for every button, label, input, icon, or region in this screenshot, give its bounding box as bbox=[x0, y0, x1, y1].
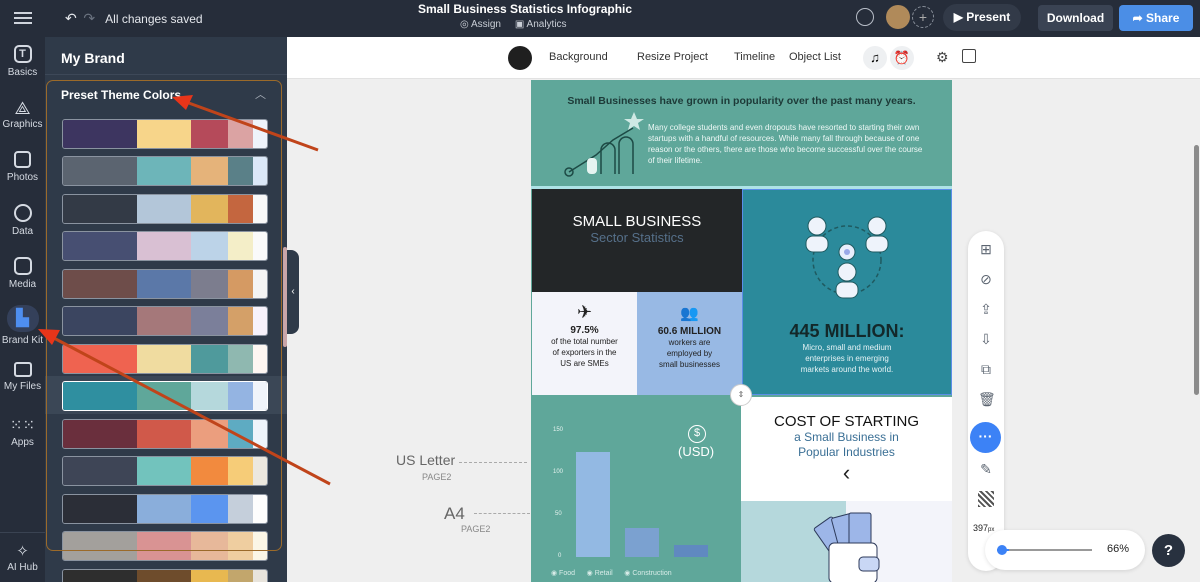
size labels: US Letter bbox=[396, 452, 455, 468]
panel heading: My Brand bbox=[61, 50, 125, 66]
canvas toolbar: ⚙ bbox=[936, 49, 949, 65]
bar chart: $ bbox=[694, 427, 700, 439]
brand panel: ︿ bbox=[255, 89, 266, 101]
title block: Sector Statistics bbox=[590, 230, 684, 245]
text: A4 bbox=[444, 504, 465, 523]
stat: exporters: of the total number bbox=[551, 337, 618, 346]
cost heading panel: Popular Industries bbox=[798, 445, 895, 459]
collapse tab: ‹ bbox=[291, 286, 295, 297]
arrow: to preset theme colors bbox=[172, 95, 318, 150]
stat: workers: 60.6 MILLION bbox=[658, 326, 721, 337]
icon: wallet bbox=[741, 501, 952, 582]
intro section bbox=[564, 95, 922, 177]
help button: ? bbox=[1164, 542, 1173, 559]
canvas toolbar: ⏰ bbox=[894, 50, 910, 65]
intro section: Many college students and even dropouts have resorted to starting their own startups with a handful of resources. While many fall through because of one reason or the others, there are those who become successful over the course of their lifetime. bbox=[648, 123, 922, 165]
left icon rail: Data bbox=[12, 226, 33, 237]
bar chart bbox=[531, 397, 741, 582]
stat: workers: small businesses bbox=[659, 360, 720, 369]
stat: exporters: ✈ bbox=[577, 302, 592, 322]
left icon rail: Photos bbox=[7, 172, 38, 183]
445 million panel: enterprises in emerging bbox=[805, 354, 889, 363]
project title: Small Business Statistics Infographic bbox=[418, 2, 632, 16]
size labels: PAGE2 bbox=[422, 472, 451, 482]
section heading: Preset Theme Colors bbox=[61, 88, 181, 102]
left icon rail bbox=[0, 37, 45, 582]
canvas toolbar: Timeline bbox=[734, 51, 775, 63]
highlight box bbox=[46, 80, 282, 551]
top bar: + bbox=[919, 9, 927, 25]
stat: exporters: 97.5% bbox=[570, 325, 599, 336]
more button bbox=[970, 422, 1001, 453]
more button: ··· bbox=[978, 428, 992, 444]
assign analytics: ◎ Assign ▣ Analytics bbox=[460, 19, 567, 30]
side toolbar: ⇪ bbox=[980, 301, 992, 317]
share button: ➦ Share bbox=[1133, 11, 1179, 25]
left icon rail: ⁙⁙ bbox=[10, 417, 35, 434]
brand kit active: Brand Kit bbox=[2, 335, 43, 346]
collapse tab bbox=[287, 250, 299, 334]
cost heading panel: a Small Business in bbox=[794, 430, 899, 444]
present button: ▶ Present bbox=[954, 10, 1010, 24]
bar chart: 0 bbox=[558, 553, 561, 559]
arrow: to brand kit bbox=[38, 329, 330, 484]
title block bbox=[532, 189, 742, 292]
cost heading panel bbox=[741, 397, 952, 501]
stat: exporters bbox=[532, 292, 637, 395]
bar chart: (USD) bbox=[678, 444, 714, 459]
stat: exporters: US are SMEs bbox=[560, 359, 609, 368]
canvas toolbar bbox=[287, 37, 1200, 79]
size labels bbox=[396, 452, 527, 482]
bar chart: ◉ Food ◉ Retail ◉ Construction bbox=[551, 570, 672, 577]
brand kit active bbox=[2, 305, 43, 346]
left icon rail: T bbox=[19, 48, 26, 60]
stat: workers: workers are bbox=[669, 338, 710, 347]
bar chart: 100 bbox=[553, 469, 563, 475]
cost heading panel: COST OF STARTING bbox=[774, 413, 919, 430]
text: PAGE2 bbox=[461, 524, 490, 534]
stat: workers: 👥 bbox=[680, 305, 699, 322]
present button bbox=[943, 4, 1021, 31]
download button bbox=[1038, 5, 1113, 31]
left icon rail: ✧ bbox=[16, 543, 29, 560]
canvas toolbar: Resize Project bbox=[637, 51, 708, 63]
side toolbar: ⊘ bbox=[980, 271, 992, 287]
comment and avatar bbox=[856, 8, 874, 26]
title block: SMALL BUSINESS bbox=[573, 213, 701, 230]
445 million panel: Micro, small and medium bbox=[803, 343, 891, 352]
left icon rail: Graphics bbox=[2, 119, 42, 130]
selected row band bbox=[45, 376, 287, 414]
left icon rail: Media bbox=[9, 279, 36, 290]
side toolbar: ✎ bbox=[980, 461, 992, 477]
zoom slider bbox=[985, 530, 1145, 570]
icon: growth chart bbox=[564, 112, 644, 177]
scrollbar bbox=[1194, 145, 1199, 395]
stat: exporters: of exporters in the bbox=[552, 348, 617, 357]
stat: workers bbox=[637, 292, 742, 395]
intro section: Small Businesses have grown in popularity over the past many years. bbox=[567, 95, 916, 107]
side toolbar: 397px bbox=[973, 523, 994, 533]
side toolbar: ⇩ bbox=[980, 331, 992, 347]
left icon rail: ⟁ bbox=[14, 98, 31, 118]
icon: team network bbox=[806, 216, 888, 298]
share button bbox=[1119, 5, 1193, 31]
undo redo and save status: ↶ ↷ All changes saved bbox=[65, 10, 203, 26]
445 million panel bbox=[742, 189, 952, 395]
infographic bbox=[531, 80, 952, 582]
top bar bbox=[0, 0, 1200, 37]
palette rows bbox=[62, 119, 268, 582]
cost heading panel: ‹ bbox=[843, 460, 850, 485]
selection strip bbox=[531, 186, 952, 189]
left icon rail: My Files bbox=[4, 381, 41, 392]
445 million panel: 445 MILLION: bbox=[789, 321, 904, 341]
help button bbox=[1152, 534, 1185, 567]
side toolbar bbox=[968, 231, 1004, 571]
side toolbar: ⧉ bbox=[981, 361, 991, 377]
445 million panel: markets around the world. bbox=[801, 365, 893, 374]
resize handle: ⇕ bbox=[738, 390, 744, 399]
menu icon bbox=[14, 12, 32, 24]
side toolbar: ⊞ bbox=[980, 241, 992, 257]
download button: Download bbox=[1047, 11, 1104, 25]
stat: workers: employed by bbox=[667, 349, 712, 358]
canvas toolbar: Object List bbox=[789, 51, 841, 63]
left icon rail: Basics bbox=[8, 67, 37, 78]
bar chart: 50 bbox=[555, 511, 562, 517]
scroll handle bbox=[283, 247, 287, 347]
resize handle bbox=[730, 384, 752, 406]
side toolbar: 🗑 bbox=[978, 391, 996, 407]
bar chart: 150 bbox=[553, 427, 563, 433]
zoom slider: 66% bbox=[1107, 543, 1129, 555]
canvas toolbar: Background bbox=[549, 51, 608, 63]
brand kit active: ▙ bbox=[16, 310, 29, 327]
canvas toolbar: ♫ bbox=[870, 50, 880, 65]
left icon rail: Apps bbox=[11, 437, 34, 448]
left icon rail: AI Hub bbox=[7, 562, 38, 573]
brand panel bbox=[45, 37, 287, 582]
